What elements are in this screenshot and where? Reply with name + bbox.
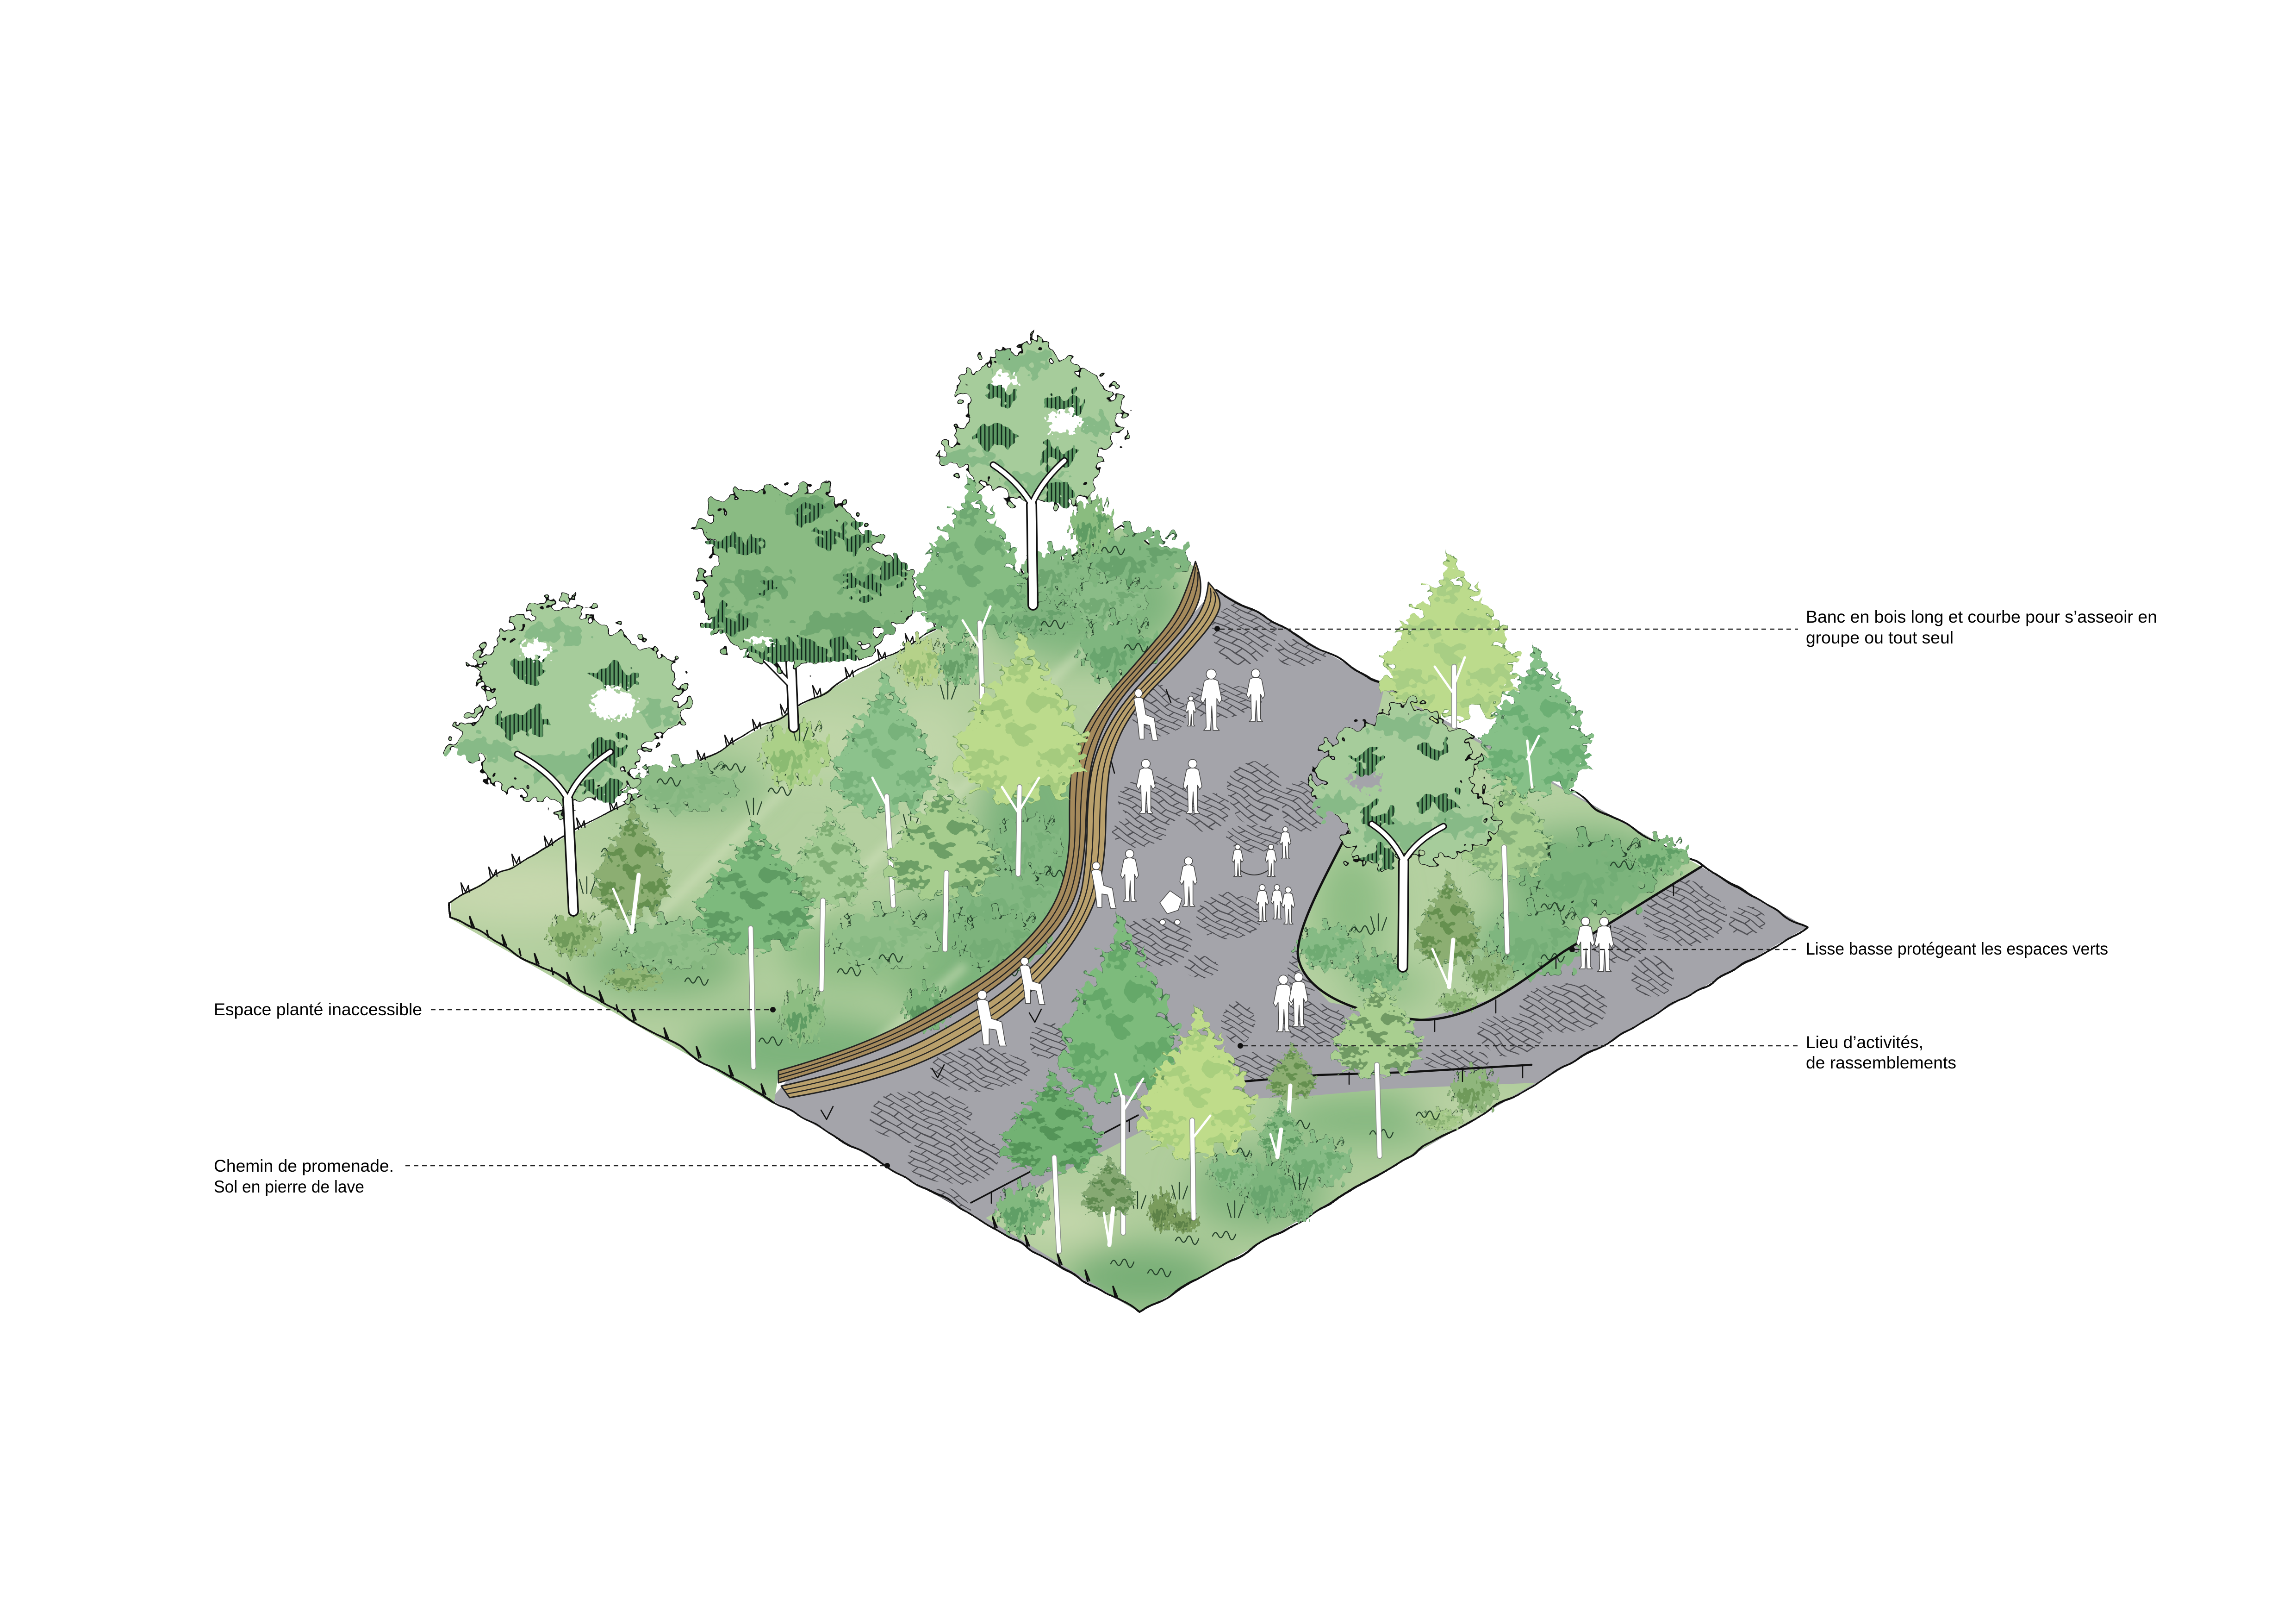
label: promenade path: Sol en pierre de lave bbox=[214, 1177, 364, 1196]
couple on right path bbox=[1576, 917, 1594, 969]
shrubs and ground scribbles bbox=[548, 500, 1686, 1277]
label: wooden bench: Banc en bois long et courbe pour s’asseoir en bbox=[1806, 607, 2157, 626]
tree: lime beside bench bbox=[953, 634, 1089, 874]
bushes in planted ground bbox=[548, 500, 1185, 1042]
rear bench ribbon bbox=[778, 562, 1201, 1083]
bushes in foreground strip bbox=[997, 1070, 1497, 1234]
large canopy tree on island bbox=[1310, 701, 1500, 967]
woman holding child bbox=[1183, 759, 1202, 813]
label: promenade path: Chemin de promenade. bbox=[214, 1156, 394, 1175]
seated reader bbox=[1091, 862, 1116, 908]
label: activity place: Lieu d’activités, bbox=[1806, 1033, 1923, 1052]
tree bbox=[693, 822, 815, 1067]
label: low rail: Lisse basse protégeant les espaces verts bbox=[1806, 939, 2108, 958]
paved promenade ground in lava stone bbox=[771, 589, 1807, 1312]
lava stone brick paving patches bbox=[870, 599, 1766, 1236]
small dark tree on island bbox=[1414, 872, 1481, 987]
parent and child bbox=[1186, 696, 1196, 726]
tree: dark rounded canopy, middle bbox=[698, 483, 921, 727]
seated on lower bench bbox=[1020, 957, 1045, 1005]
tree: large canopy, top bbox=[937, 337, 1126, 605]
small dark tree bbox=[592, 804, 672, 932]
tree bbox=[884, 779, 1001, 949]
low rail protecting the planted areas bbox=[971, 831, 1701, 1203]
bench supports bbox=[821, 690, 1171, 1119]
young trees in planted ground bbox=[592, 674, 1001, 1067]
small tree bbox=[1266, 1043, 1317, 1112]
label: planted space: Espace planté inaccessible bbox=[214, 1000, 422, 1019]
label: wooden bench: groupe ou tout seul bbox=[1806, 628, 1954, 647]
large canopy tree, left bbox=[448, 597, 685, 911]
tree bbox=[831, 674, 937, 906]
children playing with rope bbox=[1232, 827, 1294, 924]
lime tree bbox=[1137, 1008, 1257, 1218]
leader: low rail bbox=[1569, 947, 1798, 952]
tree bbox=[789, 808, 868, 989]
walking woman bbox=[1120, 849, 1139, 901]
woman with bag bbox=[1246, 669, 1265, 722]
tree: conifer right bbox=[1462, 648, 1593, 952]
inaccessible planted ground, left bbox=[451, 528, 1193, 1104]
planted island, right bbox=[1298, 691, 1700, 1018]
seated on bench bbox=[1134, 689, 1158, 740]
tree: conifer behind bench top bbox=[913, 479, 1027, 706]
planted strip, foreground bbox=[986, 1083, 1536, 1311]
small dark tree bbox=[1081, 1157, 1137, 1245]
front bench ribbon bbox=[781, 582, 1220, 1098]
wiggly ground scribbles bbox=[579, 546, 1634, 1277]
dark tree bbox=[1000, 1072, 1103, 1251]
leader: activity place bbox=[1238, 1043, 1798, 1049]
ground outline and grass edge bbox=[451, 528, 1807, 1312]
woman with stroller bbox=[1180, 857, 1197, 906]
tree: lime tree behind island bbox=[1380, 556, 1520, 726]
small tree bbox=[1258, 1101, 1303, 1157]
tall tree bbox=[1058, 917, 1181, 1233]
label: activity place: de rassemblements bbox=[1806, 1053, 1956, 1072]
bushes in planted island bbox=[1297, 838, 1686, 1012]
foreground trees bbox=[1000, 917, 1424, 1251]
walking couple bbox=[1274, 975, 1293, 1032]
leader: wooden bench bbox=[1214, 626, 1798, 631]
elderly man bbox=[1137, 759, 1155, 813]
long curved wooden bench bbox=[778, 562, 1220, 1119]
people on the promenade bbox=[977, 669, 1613, 1046]
tall slim tree bbox=[1331, 979, 1424, 1156]
leader: promenade path bbox=[405, 1163, 890, 1168]
stroller bbox=[1160, 891, 1182, 925]
leader: planted space bbox=[431, 1007, 776, 1012]
